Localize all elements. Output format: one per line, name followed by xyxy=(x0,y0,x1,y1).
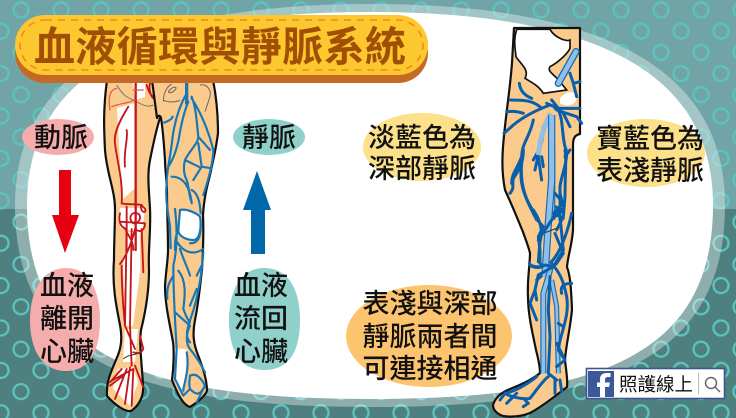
icon: facebook xyxy=(588,371,614,397)
label: superficial and deep veins connect: 靜脈兩者間 xyxy=(362,322,498,352)
illustration: veins leg xyxy=(152,80,218,407)
label: royal blue is superficial vein: 寶藍色為 xyxy=(596,124,704,154)
mid-thigh veins xyxy=(510,150,572,280)
label: blood returns to heart: 血液 xyxy=(234,271,288,301)
label: light blue is deep vein: 淡藍色為 xyxy=(368,123,476,153)
arrow: blood flows away from heart xyxy=(52,170,79,253)
label: royal blue is superficial vein xyxy=(587,119,705,187)
facebook search badge: 照護線上 xyxy=(619,374,693,395)
pelvis and upper veins xyxy=(504,29,582,220)
label: superficial and deep veins connect: 可連接相通 xyxy=(362,354,498,384)
arrow: blood flows back to heart xyxy=(243,171,271,254)
lower leg and foot veins xyxy=(500,210,572,407)
label: blood leaves heart: 心臟 xyxy=(40,337,94,367)
illustration: arteries leg xyxy=(104,80,170,411)
title banner xyxy=(15,15,428,83)
illustration: side leg with deep and superficial veins xyxy=(493,28,582,417)
label: royal blue is superficial vein: 表淺靜脈 xyxy=(596,156,704,186)
label: blood returns to heart: 心臟 xyxy=(234,337,288,367)
label: blood leaves heart: 血液 xyxy=(40,271,94,301)
label: blood leaves heart xyxy=(30,268,100,371)
label: arteries: 動脈 xyxy=(34,123,88,153)
label: superficial and deep veins connect: 表淺與深部 xyxy=(362,289,498,319)
label: light blue is deep vein xyxy=(363,113,481,184)
artery lines lower xyxy=(110,229,143,406)
label: veins xyxy=(233,119,305,155)
femur and knee bones xyxy=(113,83,145,406)
facebook search badge xyxy=(586,368,724,398)
label: veins: 靜脈 xyxy=(242,123,296,153)
label: arteries xyxy=(22,119,94,155)
label: blood returns to heart xyxy=(229,268,300,370)
artery lines upper xyxy=(109,83,157,250)
label: light blue is deep vein: 深部靜脈 xyxy=(368,154,476,184)
icon: search xyxy=(706,378,720,392)
label: blood returns to heart: 流回 xyxy=(234,304,288,334)
title text: 血液循環與靜脈系統 xyxy=(34,24,406,70)
label: superficial and deep veins connect xyxy=(346,285,512,387)
label: blood leaves heart: 離開 xyxy=(40,304,94,334)
